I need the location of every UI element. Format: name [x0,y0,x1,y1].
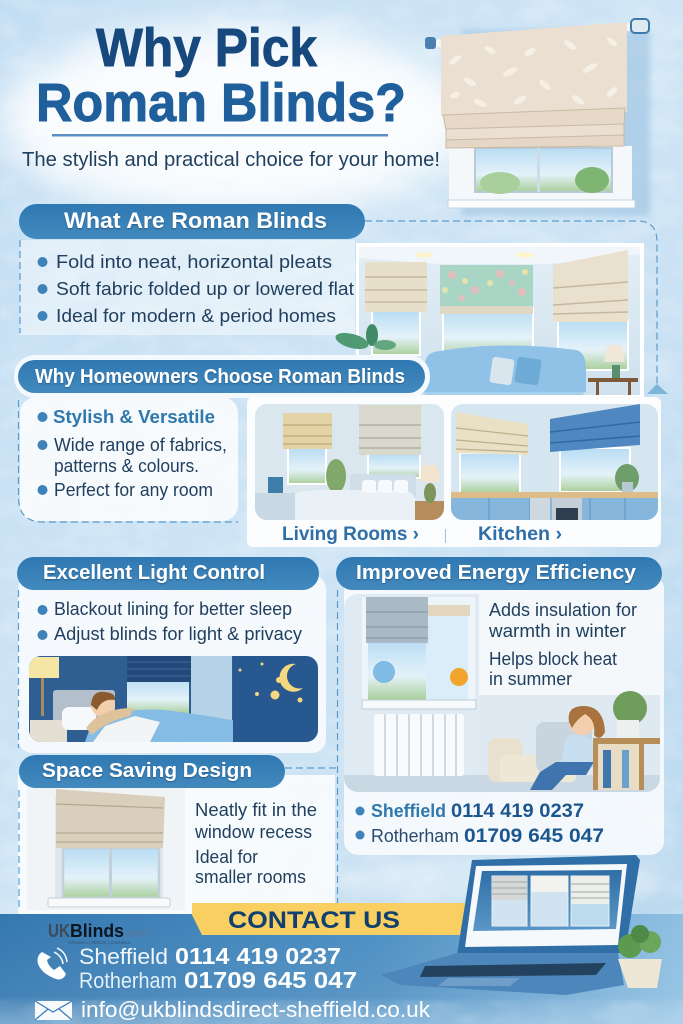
logo: UK Blinds direct: Blinds [70,921,124,941]
icon: potted plant [618,925,662,988]
illustration: child sleeping [29,656,318,742]
subtitle: The stylish and practical choice for your home! [22,149,440,171]
panel: excellent light control [17,557,326,753]
phone list: 01709 645 047 [464,826,604,847]
phone list [356,801,604,847]
email address: info@ukblindsdirect-sheffield.co.uk [81,997,431,1022]
logo: UK Blinds direct [48,921,152,945]
icon: houseplant [334,324,396,352]
bullet list: light control: Blackout lining for better sleep [54,599,292,619]
text: insulation benefits [488,600,637,689]
panel: room photos [247,397,661,547]
contact numbers: Sheffield [79,944,168,969]
text: space saving benefits: window recess [194,822,312,842]
panel: why homeowners choose roman blinds [14,355,430,522]
title: Roman Blinds? [36,73,406,133]
illustration: window, radiator and child in armchair [344,594,663,792]
title underline [52,134,388,136]
heading pill: what are roman blinds: What Are Roman Blinds [64,208,327,233]
illustration: living room with three blinds [356,243,644,399]
logo: UK Blinds direct: UK [48,921,70,941]
text: space saving benefits: Ideal for [195,847,258,867]
bullet list: stylish and versatile: patterns & colours. [54,456,199,476]
bullet list: what are roman blinds: Ideal for modern & period homes [56,306,336,326]
title [36,18,406,133]
phone list: Rotherham [371,826,459,846]
icon: envelope [35,1001,72,1020]
contact us banner [192,903,465,935]
text: insulation benefits: Helps block heat [489,649,617,669]
logo: UK Blinds direct: direct [124,928,152,940]
heading pill: space saving design [19,755,285,788]
bullet list: light control: Adjust blinds for light & privacy [54,624,302,644]
text: insulation benefits: Adds insulation for [489,600,637,620]
heading pill: improved energy efficiency [336,557,662,590]
panel: improved energy efficiency [336,557,664,905]
contact numbers: 01709 645 047 [184,967,357,993]
bullet list: stylish and versatile: Perfect for any room [54,480,213,500]
hero illustration: roman blind on window [425,19,650,216]
text: space saving benefits: Neatly fit in the [195,800,317,820]
footer band: contact [0,903,683,1024]
illustration: bedroom [255,404,444,520]
illustration: kitchen [451,404,658,520]
heading pill: improved energy efficiency: Improved Energy Efficiency [356,562,637,584]
contact numbers [79,943,357,993]
bullet list: stylish and versatile [38,407,227,500]
heading pill: excellent light control [17,557,319,590]
bullet list: stylish and versatile: Stylish & Versatile [53,407,215,427]
arrow: dashed connector tip [647,384,668,394]
panel: what are roman blinds [19,204,668,394]
bullet list: light control [38,599,302,644]
bullet list: stylish and versatile: Wide range of fabrics, [54,435,227,455]
caption: living rooms: Living Rooms › [282,524,419,545]
title: Why Pick [96,18,318,78]
text: insulation benefits: in summer [489,669,572,689]
illustration: laptop [381,855,640,995]
heading pill: excellent light control: Excellent Light Control [43,562,265,584]
heading pill: why homeowners [14,355,430,398]
bullet list: what are roman blinds: Fold into neat, horizontal pleats [56,252,332,272]
heading pill: why homeowners: Why Homeowners Choose Roman Blinds [35,366,405,388]
heading pill: what are roman blinds [19,204,365,239]
contact numbers: Rotherham [79,968,177,993]
phone list: Sheffield [371,801,446,821]
illustration: recessed window blind [27,788,185,910]
logo: UK Blinds direct: Shutters | Blinds | Curtains [68,940,131,945]
contact numbers: 0114 419 0237 [175,943,341,969]
heading pill: space saving design: Space Saving Design [42,760,252,782]
panel: space saving design [18,755,336,915]
contact us banner: CONTACT US [228,907,400,934]
bullet list: what are roman blinds: Soft fabric folded up or lowered flat [56,279,354,299]
text: insulation benefits: warmth in winter [488,621,626,641]
phone list: 0114 419 0237 [451,801,584,822]
caption: kitchen: Kitchen › [478,524,562,545]
text: space saving benefits: smaller rooms [195,867,306,887]
bullet list: what are roman blinds [38,252,354,326]
text: space saving benefits [194,800,317,887]
icon: phone [38,948,67,979]
